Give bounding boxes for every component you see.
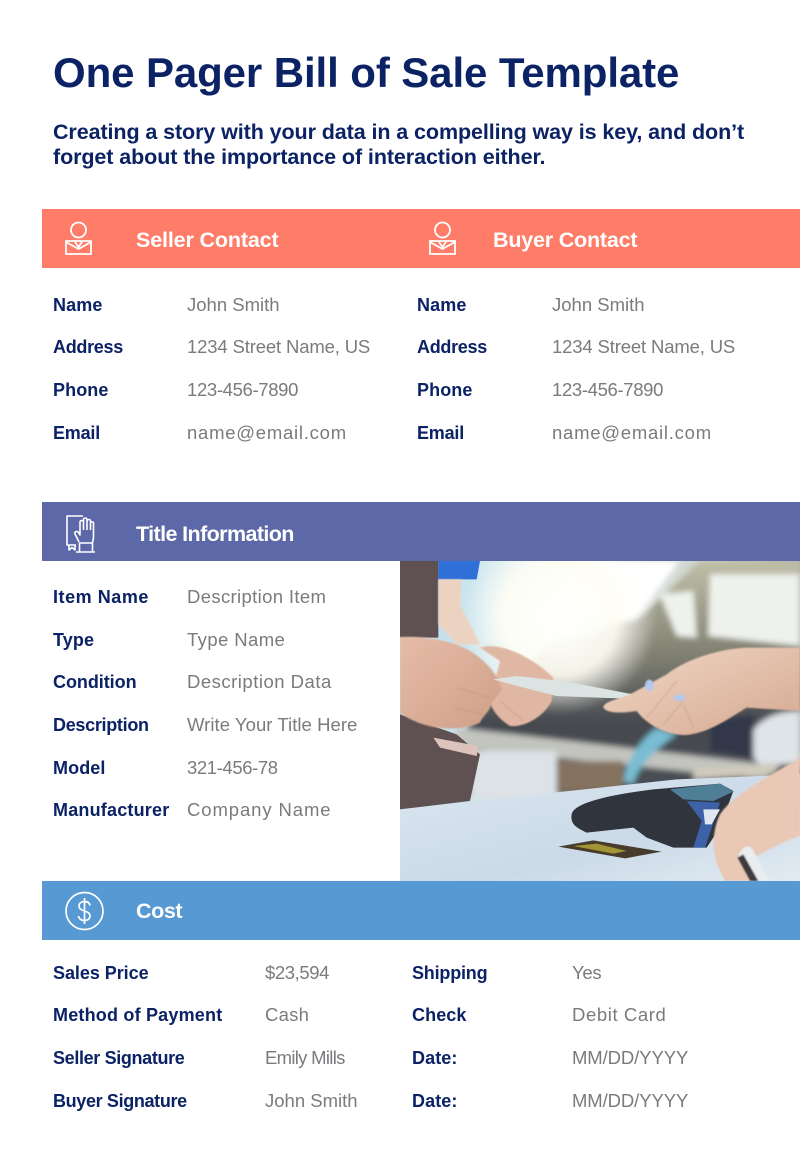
panel: cost details right: Shipping	[412, 963, 487, 983]
panel: cost details right: Check	[412, 1005, 467, 1025]
panel: seller details: name@email.com	[187, 422, 347, 443]
panel: seller details: Phone	[53, 380, 109, 400]
panel: title details: Write Your Title Here	[187, 714, 357, 735]
panel: cost details right: MM/DD/YYYY	[572, 1090, 688, 1111]
title: One Pager Bill of Sale Template	[53, 49, 679, 96]
panel: cost details left: Buyer Signature	[53, 1091, 187, 1111]
panel: title details: Type Name	[187, 629, 285, 650]
panel: cost details left: Method of Payment	[53, 1005, 222, 1025]
panel: cost details left: Seller Signature	[53, 1048, 184, 1068]
apron and sleeve	[400, 561, 480, 809]
heading: title information: Title Information	[136, 522, 294, 546]
panel: title details: Description	[53, 715, 149, 735]
panel: buyer details: Phone	[417, 380, 473, 400]
panel: seller details	[53, 294, 370, 443]
panel: cost details left: Cash	[265, 1004, 309, 1025]
heading: cost: Cost	[136, 899, 182, 923]
panel: seller details: 1234 Street Name, US	[187, 336, 370, 357]
heading: buyer contact: Buyer Contact	[493, 228, 637, 252]
subtitle	[53, 120, 744, 169]
panel: cost details left: Sales Price	[53, 963, 149, 983]
photo background	[400, 521, 800, 881]
foreground hand with phone	[714, 758, 800, 881]
buyer hand	[603, 648, 800, 735]
panel: cost details right: Yes	[572, 962, 601, 983]
panel: title details: Item Name	[53, 587, 149, 607]
panel: cost details right: Date:	[412, 1048, 458, 1068]
panel: cost details right: MM/DD/YYYY	[572, 1047, 688, 1068]
panel: buyer details: 123-456-7890	[552, 379, 663, 400]
panel: title details: Description Data	[187, 671, 332, 692]
panel: seller details: Address	[53, 337, 123, 357]
panel: cost details left: Emily Mills	[265, 1047, 345, 1068]
panel: buyer details: 1234 Street Name, US	[552, 336, 735, 357]
icon: dollar coin	[65, 892, 104, 930]
panel: title details: Condition	[53, 672, 137, 692]
payment terminal	[571, 784, 733, 848]
payment card on table	[558, 840, 662, 858]
seller hands	[400, 637, 553, 729]
panel: seller details: 123-456-7890	[187, 379, 298, 400]
panel: title details	[53, 586, 357, 820]
subtitle: Creating a story with your data in a compelling way is key, and don’t	[53, 120, 744, 144]
panel: buyer details: Email	[417, 423, 464, 443]
panel: title details: Type	[53, 630, 94, 650]
panel: title details: Company Name	[187, 799, 331, 820]
panel: seller details: John Smith	[187, 294, 280, 315]
icon: seller contact	[65, 222, 92, 255]
icon: hand on book	[66, 515, 95, 553]
panel: cost details right	[412, 962, 688, 1111]
panel: cost details left: John Smith	[265, 1090, 358, 1111]
heading: seller contact: Seller Contact	[136, 228, 278, 252]
panel: cost details left: $23,594	[265, 962, 329, 983]
panel: title details: Model	[53, 758, 106, 778]
panel: buyer details: Address	[417, 337, 487, 357]
panel: buyer details: Name	[417, 295, 466, 315]
panel: buyer details: John Smith	[552, 294, 645, 315]
table	[400, 774, 800, 881]
panel: title details: 321-456-78	[187, 757, 278, 778]
subtitle: forget about the importance of interaction either.	[53, 145, 545, 169]
panel: title information header band	[42, 502, 800, 561]
panel: title details: Description Item	[187, 586, 326, 607]
panel: title details: Manufacturer	[53, 800, 169, 820]
panel: cost header band	[42, 881, 800, 940]
panel: buyer details	[417, 294, 735, 443]
panel: contact header band	[42, 209, 800, 268]
panel: seller details: Email	[53, 423, 100, 443]
panel: cost details right: Debit Card	[572, 1004, 666, 1025]
icon: buyer contact	[429, 222, 456, 255]
photo: card payment handover	[400, 561, 800, 881]
panel: seller details: Name	[53, 295, 102, 315]
panel: cost details left	[53, 962, 358, 1111]
panel: cost details right: Date:	[412, 1091, 458, 1111]
banknote or card being passed	[493, 676, 633, 699]
panel: buyer details: name@email.com	[552, 422, 712, 443]
